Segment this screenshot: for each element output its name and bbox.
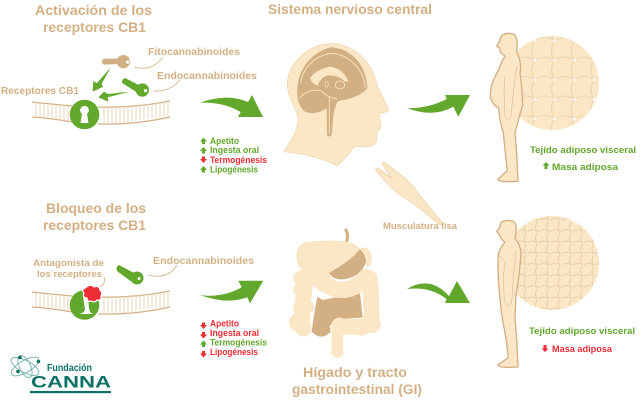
label: Musculatura lisa: Musculatura lisa	[383, 221, 458, 232]
list: activation effects: Lipogénesis	[210, 164, 258, 174]
arrow: tan key to receptor	[93, 67, 111, 92]
membrane with blocked receptor	[32, 285, 170, 320]
label: increased fat mass: Masa adiposa	[552, 162, 619, 173]
icon: green key	[122, 78, 149, 97]
illustration: obese body	[490, 33, 523, 182]
list: blockade effects: Lipogénesis	[210, 347, 258, 357]
small intestine	[312, 292, 363, 337]
title: Bloqueo de los receptores CB1: Bloqueo de los	[46, 200, 146, 216]
icon: tan key	[102, 55, 130, 68]
title: Hígado y tracto gastrointestinal (GI)	[292, 364, 422, 397]
title: Bloqueo de los receptores CB1: receptores CB1	[43, 217, 146, 233]
list: blockade effects: Ingesta oral	[210, 328, 259, 338]
liver	[297, 241, 360, 274]
logo: Fundación CANNA: Fundación	[47, 362, 92, 374]
title: Activación de los receptores CB1	[35, 2, 152, 35]
stomach	[327, 248, 366, 279]
illustration: smooth muscle	[375, 162, 443, 225]
brain	[297, 47, 367, 137]
label: Antagonista de los receptores: los receptores	[37, 269, 102, 280]
label: Antagonista de los receptores: Antagonista de	[33, 258, 104, 269]
title: Hígado y tracto gastrointestinal (GI): Hígado y tracto	[303, 364, 407, 380]
icon: green key	[117, 265, 144, 284]
panel: receptor activation diagram	[1, 46, 257, 129]
list: blockade effects	[200, 318, 267, 358]
arrow: to GI tract	[200, 281, 263, 303]
label: Endocannabinoides: Endocannabinoides	[157, 70, 257, 82]
icon: atom	[8, 353, 42, 380]
panel: receptor blockade diagram	[32, 255, 254, 320]
head silhouette	[284, 43, 389, 166]
illustration: head with brain	[284, 43, 389, 166]
illustration: lean body	[497, 220, 521, 367]
list: activation effects: Termogénesis	[210, 155, 267, 165]
illustration: visceral fat tissue, large cells	[505, 36, 599, 130]
icon: antagonist blob	[83, 285, 102, 302]
label: decreased fat mass: Masa adiposa	[552, 344, 613, 355]
label: Antagonista de los receptores	[33, 258, 104, 280]
title: Activación de los receptores CB1: receptores CB1	[43, 19, 146, 35]
arrow: to obese body	[407, 95, 470, 117]
illustration: liver and GI tract	[289, 229, 381, 358]
arrow: green key to receptor	[98, 92, 129, 102]
title: Bloqueo de los receptores CB1	[43, 200, 146, 233]
logo: Fundación CANNA	[8, 353, 111, 393]
colon	[289, 266, 381, 358]
title: Hígado y tracto gastrointestinal (GI): gastrointestinal (GI)	[292, 381, 422, 397]
label: Receptores CB1: Receptores CB1	[1, 85, 79, 97]
list: activation effects: Ingesta oral	[210, 145, 259, 155]
membrane with receptor	[32, 100, 170, 129]
list: blockade effects: Apetito	[210, 318, 239, 328]
label: Tejido adiposo visceral, top: Tejido adiposo visceral	[530, 145, 636, 156]
list: blockade effects: Termogénesis	[210, 338, 267, 348]
label: Endocannabinoides: Endocannabinoides	[153, 255, 254, 267]
label: Tejido adiposo visceral, bottom: Tejido adiposo visceral	[529, 326, 635, 337]
spleen	[361, 248, 371, 268]
esophagus	[345, 229, 348, 243]
title: Sistema nervioso central: Sistema nervioso central	[268, 1, 432, 17]
logo: Fundación CANNA: CANNA	[31, 372, 111, 392]
illustration: visceral fat tissue, small cells	[505, 216, 599, 310]
arrow: to lean body	[407, 281, 470, 303]
list: activation effects: Apetito	[210, 136, 239, 146]
label: Fitocannabinoides: Fitocannabinoides	[148, 46, 240, 58]
arrow: to central nervous system	[200, 95, 263, 117]
list: activation effects	[200, 136, 267, 174]
title: Activación de los receptores CB1: Activación de los	[35, 2, 152, 18]
